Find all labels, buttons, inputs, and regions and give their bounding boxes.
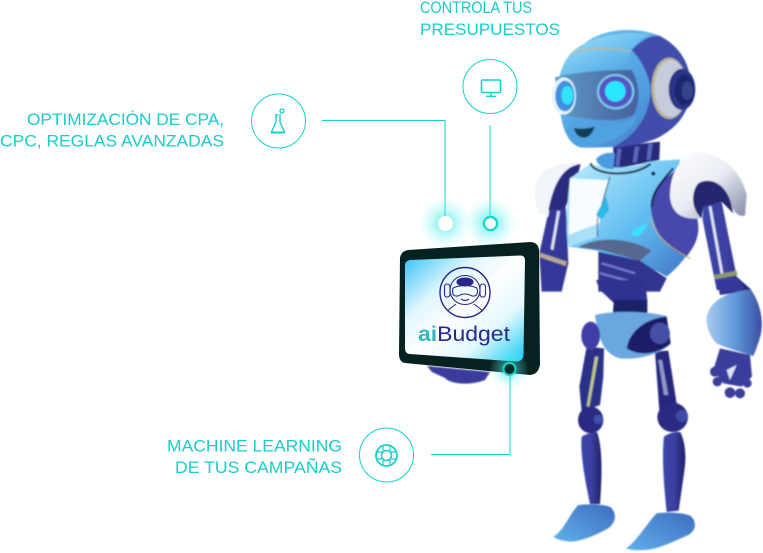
- robot right eye: [597, 74, 634, 109]
- heading: optimizacion de cpa: [0, 110, 224, 150]
- icon: lifebuoy in circle: [360, 428, 414, 482]
- robot abdomen: [598, 252, 667, 292]
- tablet screen: [405, 256, 525, 362]
- robot neck: [613, 142, 660, 169]
- robot upper body: [535, 30, 752, 292]
- hand under tablet: [427, 366, 490, 384]
- heading: optimizacion de cpa: CPC, REGLAS AVANZADAS: [0, 132, 224, 150]
- heading: controla tus presupuestos: [420, 0, 560, 39]
- robot pelvis: [595, 312, 671, 359]
- robot right shoulder pad: [670, 152, 747, 219]
- robot left knee: [578, 407, 603, 433]
- robot headphone: [651, 58, 687, 119]
- connector: tablet to lifebuoy: [431, 376, 510, 454]
- robot: [535, 30, 762, 550]
- robot right arm: [703, 202, 752, 290]
- robot waist: [596, 280, 647, 304]
- robot right foot: [626, 513, 695, 550]
- robot left shoulder: [535, 163, 580, 217]
- heading: optimizacion de cpa: OPTIMIZACIÓN DE CPA,: [27, 110, 224, 129]
- connector: monitor to tablet: [489, 125, 491, 216]
- glow: left node: [419, 197, 471, 249]
- heading: machine learning: DE TUS CAMPAÑAS: [175, 458, 342, 477]
- robot left shin: [581, 432, 601, 504]
- robot left thigh: [579, 347, 604, 412]
- robot lower body: [553, 280, 762, 550]
- logo: robot emblem: [440, 268, 490, 318]
- robot right thigh: [655, 351, 677, 410]
- glow: right node: [464, 197, 516, 249]
- node: filled white dot: [438, 216, 453, 231]
- logo: aiBudget wordmark: aiBudget: [418, 322, 510, 346]
- node: ring dot: [484, 217, 497, 230]
- robot left arm: [539, 205, 568, 292]
- connector: flask to tablet: [322, 120, 445, 216]
- robot left eye: [552, 77, 576, 115]
- robot right shin: [663, 432, 685, 512]
- robot right hand: [710, 348, 752, 398]
- icon: monitor in circle: [463, 60, 517, 114]
- robot left foot: [553, 504, 615, 542]
- heading: machine learning: MACHINE LEARNING: [167, 436, 342, 456]
- glow: bottom node: [489, 349, 529, 389]
- robot right forearm: [717, 280, 747, 295]
- tablet: [399, 242, 540, 375]
- robot head: [559, 30, 691, 148]
- heading: controla tus presupuestos: PRESUPUESTOS: [420, 20, 560, 39]
- robot mouth: [574, 127, 594, 138]
- robot right knee: [657, 403, 688, 432]
- tablet frame: [399, 242, 540, 375]
- heading: machine learning: [167, 436, 342, 477]
- node: bottom ring: [504, 363, 516, 375]
- icon: flask in circle: [252, 94, 306, 148]
- robot torso: [567, 159, 698, 277]
